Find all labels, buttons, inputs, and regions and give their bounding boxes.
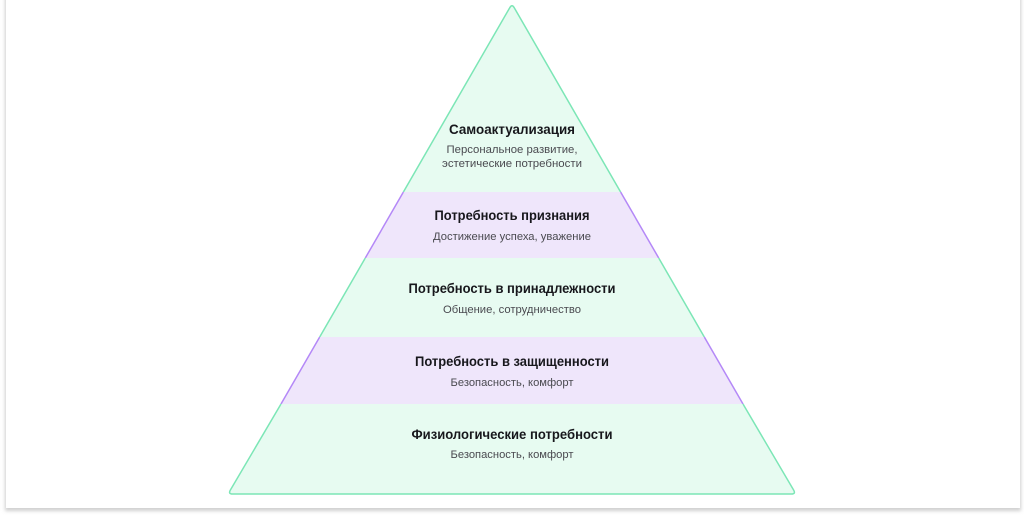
description: Безопасность, комфорт xyxy=(450,377,574,389)
description: Общение, сотрудничество xyxy=(443,304,581,316)
tier: belonging xyxy=(320,258,704,337)
heading: Самоактуализация xyxy=(449,122,575,137)
heading: Физиологические потребности xyxy=(412,427,612,442)
description: Персональное развитие, xyxy=(446,144,578,156)
tier: recognition xyxy=(365,192,659,258)
heading: Потребность в защищенности xyxy=(415,354,609,369)
tier: physiological xyxy=(230,404,794,494)
tier: self-actualization: эстетические потребности xyxy=(442,158,582,170)
tier: safety xyxy=(281,337,743,404)
tier: self-actualization xyxy=(403,6,621,192)
description: Безопасность, комфорт xyxy=(450,449,574,461)
heading: Потребность признания xyxy=(434,208,590,223)
description: Достижение успеха, уважение xyxy=(433,231,591,243)
heading: Потребность в принадлежности xyxy=(408,281,616,296)
pyramid xyxy=(230,6,794,494)
